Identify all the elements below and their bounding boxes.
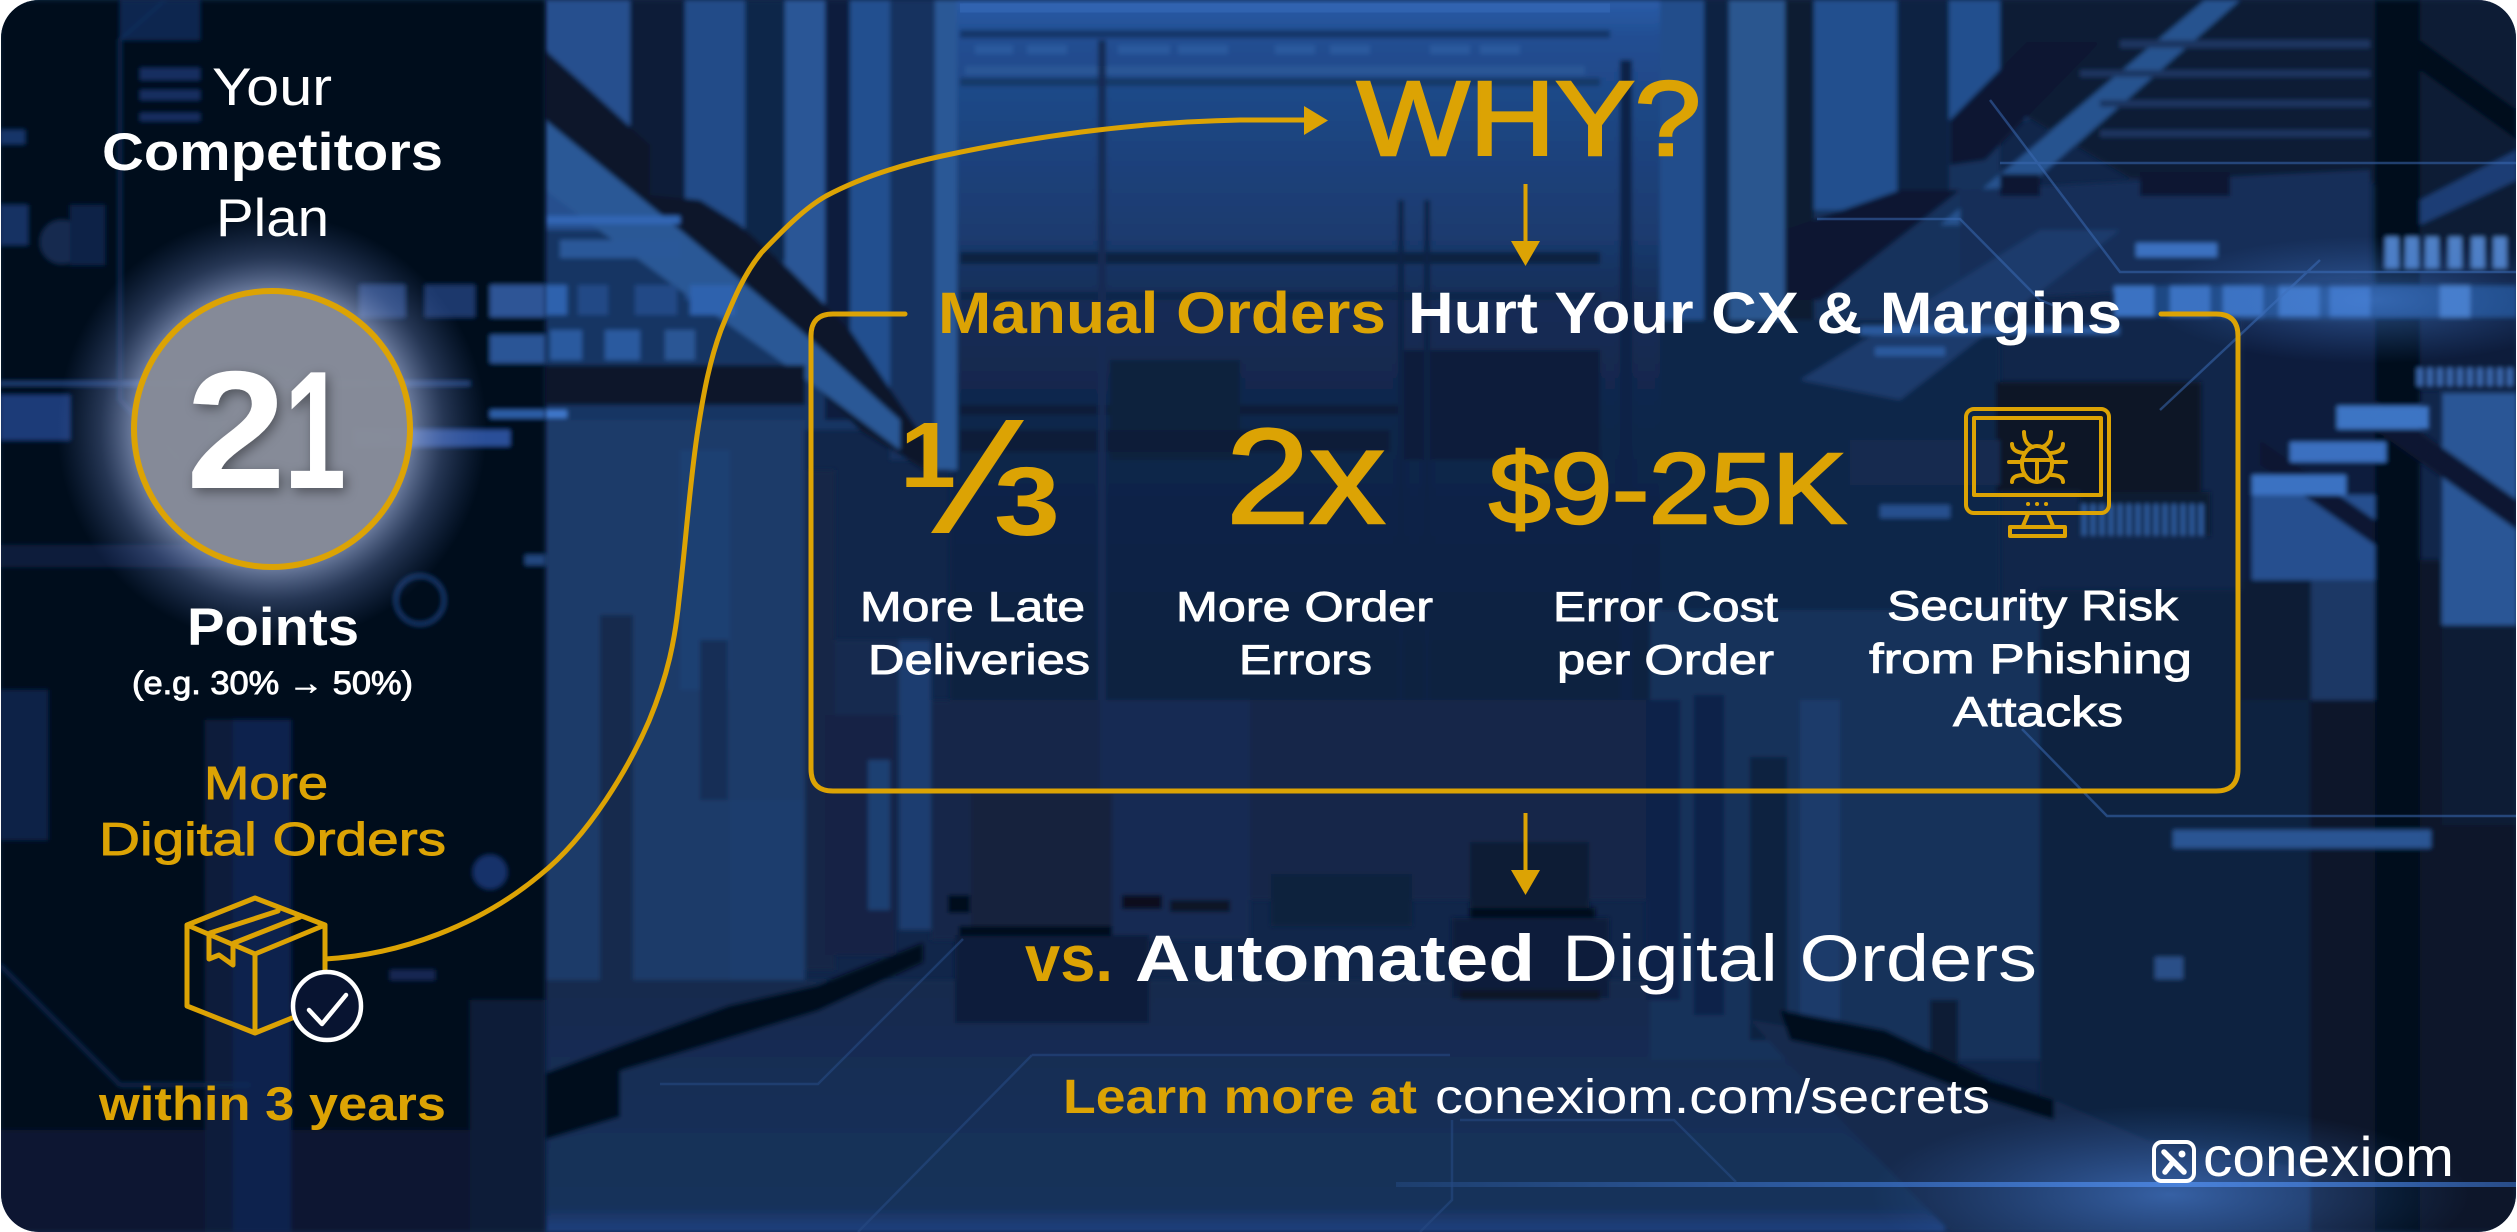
heading: why: WHY? — [1357, 60, 1701, 178]
stat: error cost per order: $9-25K — [1489, 433, 1846, 545]
more digital orders: Digital Orders — [99, 813, 446, 865]
heading: manual orders hurt your cx and margins: Hurt Your CX & Margins — [1408, 281, 2122, 346]
arrow: curve from package to why — [325, 106, 1328, 959]
stat: error cost per order: Error Cost — [1553, 583, 1778, 630]
more digital orders: More — [204, 757, 328, 809]
stat: security risk from phishing attacks: from Phishing — [1869, 635, 2192, 682]
points label: Points — [187, 598, 359, 657]
glow behind circle — [57, 214, 487, 644]
stat: error cost per order: per Order — [1557, 636, 1774, 683]
right blue bits — [1660, 320, 2000, 610]
call to action: learn more: conexiom.com/secrets — [1435, 1071, 1990, 1124]
centre rack — [950, 0, 1670, 720]
stat: security risk from phishing attacks — [1869, 409, 2192, 735]
stat: 2x more order errors: Errors — [1239, 636, 1372, 683]
robots — [971, 793, 1112, 926]
corner glow under logo — [1906, 1115, 2444, 1232]
icon: package with check — [187, 898, 361, 1040]
left text: your competitors plan: Plan — [216, 189, 329, 248]
right boxes — [1650, 600, 2050, 1060]
icon: monitor with bug — [1966, 409, 2109, 536]
points label: (e.g. 30% → 50%) — [132, 665, 413, 701]
right glow band — [2192, 242, 2516, 358]
logo: conexiom — [2152, 1136, 2450, 1183]
heading: vs automated digital orders: vs. — [1025, 921, 1113, 995]
left dark panel — [0, 0, 545, 1232]
diagonal beams — [545, 50, 925, 470]
digital overlay lines — [2173, 830, 2431, 848]
floor glow line — [1396, 1182, 2517, 1187]
left text: your competitors plan — [104, 68, 441, 236]
stat: security risk from phishing attacks: Attacks — [1953, 688, 2123, 735]
stat: one third more late deliveries: Deliveries — [868, 636, 1090, 683]
circle with 21: 1 — [284, 336, 346, 524]
call to action: learn more: Learn more at — [1063, 1071, 1417, 1124]
circle with 21: 2 — [186, 336, 286, 524]
logo: conexiom: conexiom — [2203, 1125, 2454, 1188]
stat: security risk from phishing attacks: Security Risk — [1887, 582, 2179, 629]
stat: one third more late deliveries — [864, 420, 1089, 675]
within 3 years: within 3 years — [98, 1077, 446, 1130]
more digital orders — [103, 766, 444, 865]
stat: error cost per order — [1489, 433, 1846, 683]
heading: vs automated digital orders — [1025, 933, 2034, 994]
panel: impacts frame — [811, 314, 2238, 791]
call to action: learn more — [1066, 1078, 1988, 1114]
left boxes — [545, 420, 805, 1030]
arrow: panel to automated — [1511, 813, 1540, 895]
left rack columns — [545, 0, 955, 430]
floor — [545, 980, 1945, 1232]
stat: 2x more order errors — [1180, 427, 1433, 675]
heading: vs automated digital orders: Automated — [1135, 921, 1535, 995]
stat: 2x more order errors: More Order — [1176, 583, 1433, 630]
arrow: why to manual orders — [1511, 184, 1540, 266]
stat: one third more late deliveries: 1 — [900, 403, 956, 507]
upper right — [1812, 143, 2004, 324]
stat: 2x more order errors: 2x — [1226, 401, 1385, 552]
stat: one third more late deliveries: More Late — [860, 583, 1085, 630]
left text: your competitors plan: Competitors — [102, 123, 443, 182]
stat: one third more late deliveries: 3 — [994, 447, 1060, 556]
heading: vs automated digital orders: Digital Orders — [1562, 921, 2037, 995]
points label — [132, 598, 413, 701]
heading: manual orders hurt your cx and margins: Manual Orders — [938, 281, 1386, 346]
heading: manual orders hurt your cx and margins — [942, 290, 2120, 346]
circle with 21 — [134, 291, 410, 567]
left text: your competitors plan: Your — [212, 58, 332, 117]
